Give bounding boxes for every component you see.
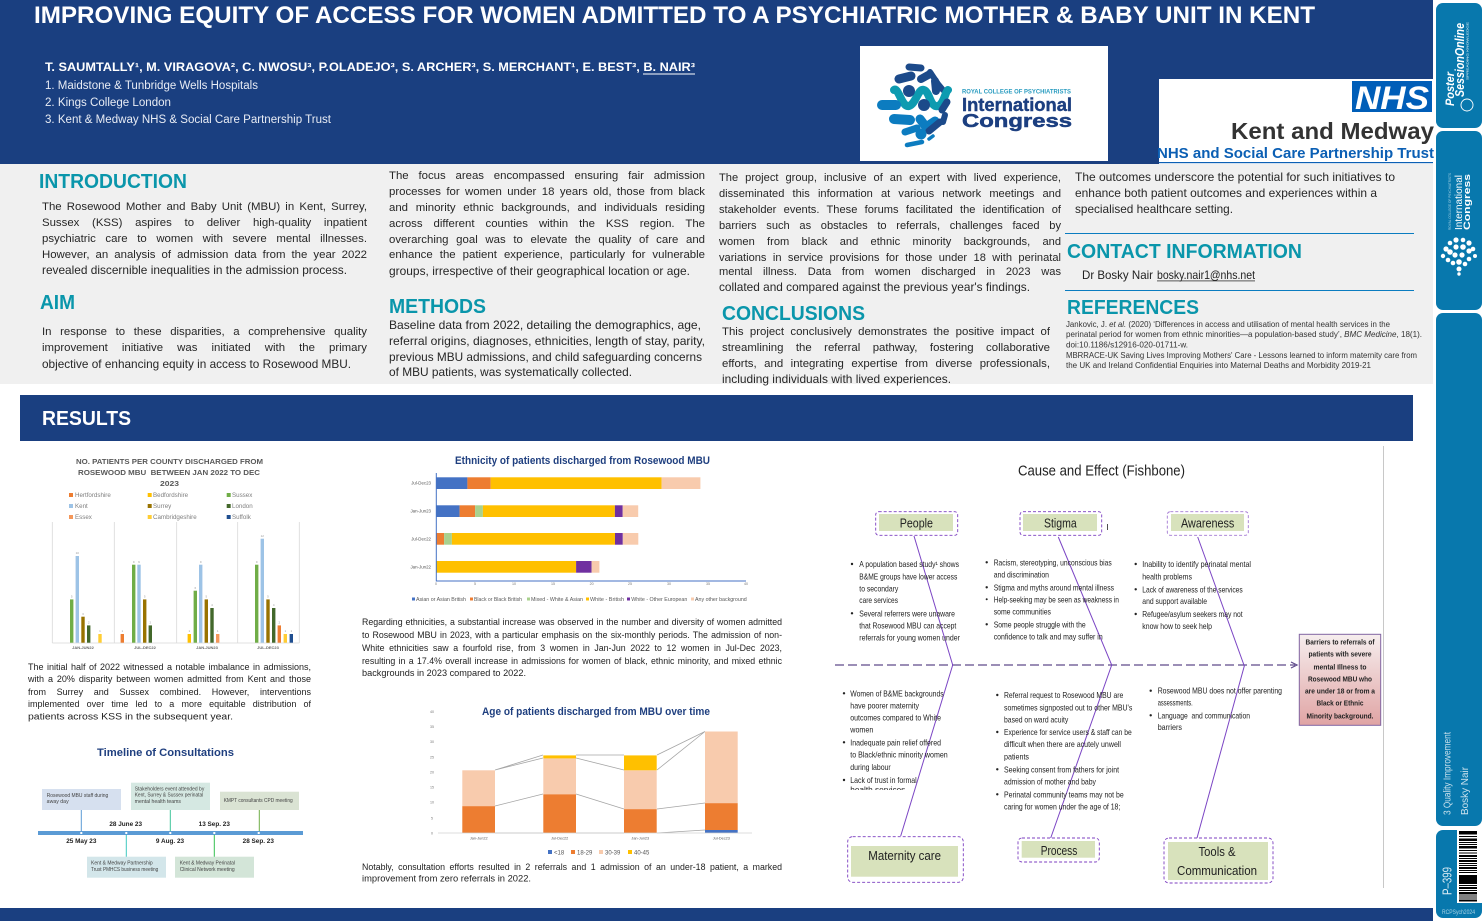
- affiliations: [45, 80, 332, 126]
- text: conclusions: including individuals with lived experiences.: [722, 373, 951, 386]
- category: People: [876, 512, 958, 535]
- text: ethnicity commentary: White ethnicities saw a fourfold rise, from 3 women in Jan-Jun 2022 to 12 women in Jul-Dec 2023,: [362, 643, 782, 653]
- logo: NHS Kent and Medway: Kent and Medway: [1231, 118, 1434, 144]
- sidebar panel: theme and author: Bosky Nair: [1459, 767, 1471, 815]
- bullets: Awareness: know how to seek help: [1142, 621, 1212, 631]
- bullets: Maternity care: Women of B&ME backgrounds: [850, 688, 944, 698]
- sidebar panel: theme and author: [1436, 313, 1482, 826]
- chart legend: Essex: [75, 514, 93, 521]
- bullets: People: to secondary: [859, 583, 899, 593]
- bullets: Stigma: Help-seeking may be seen as weakness in: [994, 594, 1119, 604]
- chart legend: Sussex: [232, 492, 253, 499]
- axis ticks: 15: [430, 786, 434, 790]
- text: references: the UK and Ireland Confidential Enquiries into Maternal Deaths and Morbidity 2019-21: [1066, 361, 1372, 370]
- chart data labels: 1: [217, 629, 219, 633]
- bullets: Awareness: Inability to identify perinatal mental: [1142, 559, 1251, 569]
- chart legend: [548, 850, 650, 856]
- chart data labels: 3: [82, 612, 84, 616]
- text: ethnicity commentary: to Rosewood MBU in 2023, with a particular emphasis on the six-monthly periods. The admission of non-: [362, 630, 782, 640]
- panel: text sections: [0, 164, 1433, 386]
- column labels: Jan-Jun23: [631, 836, 649, 840]
- text: focus areas: across different counties within the KSS region. The: [389, 218, 705, 230]
- timeline event: stakeholders: mental health teams: [135, 799, 182, 805]
- chart legend: Asian or Asian British: [416, 597, 466, 603]
- bullets: Stigma: Racism, stereotyping, unconscious bias: [994, 557, 1112, 567]
- text: references: MBRRACE-UK Saving Lives Improving Mothers' Care - Lessons learned to inform maternity care from: [1066, 351, 1417, 360]
- text: focus areas: enhance the patient experience, particularly for vulnerable: [389, 249, 705, 261]
- text: aim: In response to these disparities, a comprehensive quality: [42, 326, 367, 338]
- text: age commentary: improvement from zero referrals in 2022.: [362, 874, 531, 884]
- timeline event: PMHCS: [87, 857, 166, 878]
- text: project group: barriers such as obstacles to referrals, challenges faced by: [719, 220, 1061, 232]
- chart legend: 30-39: [605, 850, 621, 856]
- text: references: [1066, 320, 1422, 370]
- category: People: People: [900, 516, 933, 530]
- callout: barriers effect box: Rosewood MBU who: [1308, 675, 1372, 684]
- text: project group: The project group, inclusive of an expert with lived experience,: [719, 172, 1061, 184]
- bullets: Stigma: Stigma and myths around mental illness: [994, 582, 1114, 592]
- text: methods: [389, 319, 705, 379]
- axis ticks: 5: [474, 582, 476, 586]
- bullets: Tools and Communication: barriers: [1158, 722, 1182, 732]
- category: Maternity care: Maternity care: [868, 849, 941, 863]
- sidebar panel: International Congress: International: [1454, 175, 1465, 230]
- chart data labels: [71, 534, 292, 633]
- bullets: Maternity care: [843, 688, 948, 794]
- axis ticks: 5: [431, 816, 433, 820]
- timeline event: away day: Rosewood MBU staff during: [47, 793, 109, 799]
- icon: barcode: [1457, 830, 1482, 903]
- text: introduction: Sussex (KSS) aspires to deliver high-quality inpatient: [42, 217, 367, 229]
- chart legend: Any other background: [695, 597, 747, 603]
- bullets: Awareness: [1134, 559, 1251, 631]
- text: ethnicity commentary: Regarding ethnicities, a substantial increase was observed in the number and diversity of women admitted: [362, 617, 782, 627]
- text: project group: mental illness. Data from women discharged in 2023 was: [719, 266, 1061, 278]
- stacked columns: [462, 732, 738, 833]
- text: aim: improvement initiative was initiated with the primary: [42, 342, 367, 354]
- bullets: Tools and Communication: assessments.: [1158, 698, 1193, 708]
- axis ticks: 0: [435, 582, 437, 586]
- timeline dates: 25 May 23: [66, 838, 97, 845]
- text: county chart commentary: [28, 661, 311, 722]
- chart legend: Surrey: [153, 503, 172, 510]
- bullets: Awareness: health problems: [1142, 571, 1192, 581]
- authors: T. SAUMTALLY¹, M. VIRAGOVA², C. NWOSU³, P.OLADEJO³, S. ARCHER³, S. MERCHANT¹, E. BEST³, B. NAIR³: [45, 62, 695, 74]
- timeline event: stakeholders: Stakeholders event attended by: [135, 787, 205, 793]
- logo: NHS Kent and Medway: [1157, 79, 1434, 164]
- bullets: Process: based on ward acuity: [1004, 714, 1069, 724]
- logo: Royal College of Psychiatrists International Congress: ROYAL COLLEGE OF PSYCHIATRISTS: [962, 88, 1071, 96]
- row labels: [410, 480, 432, 570]
- sidebar panel: Poster Session Online: SPREADING KNOWLEDGE: [1466, 22, 1470, 80]
- text: contact: [1082, 268, 1256, 282]
- heading: contact information: CONTACT INFORMATION: [1067, 241, 1302, 263]
- text: methods: previous MBU admissions, and child safeguarding concerns: [389, 351, 702, 364]
- heading: conclusions: CONCLUSIONS: [722, 303, 865, 325]
- text: introduction: psychiatric care to women with severe mental illnesses.: [42, 233, 367, 245]
- bullets: Process: Experience for service users & staff can be: [1004, 727, 1132, 737]
- text: county chart commentary: patients across KSS in the subsequent year.: [28, 712, 233, 722]
- timeline event: stakeholders: [131, 783, 210, 810]
- text: conclusions: This project conclusively demonstrates the positive impact of: [722, 326, 1050, 338]
- text: outcomes: enhance both patient outcomes and experiences within a: [1075, 187, 1378, 200]
- chart title: ROSEWOOD MBU BETWEEN JAN 2022 TO DEC: [78, 468, 261, 477]
- header band: [0, 0, 1433, 164]
- chart legend: <18: [554, 850, 565, 856]
- heading: introduction: INTRODUCTION: [39, 171, 187, 193]
- bullets: People: A population based study¹ shows: [859, 559, 959, 569]
- row labels: Jul-Dec23: [411, 480, 432, 486]
- chart data labels: 4: [273, 603, 275, 607]
- axis ticks: 15: [551, 582, 555, 586]
- chart legend: White - Other European: [631, 597, 687, 603]
- text: focus areas: [389, 168, 705, 278]
- logo: Royal College of Psychiatrists International Congress: [860, 46, 1108, 161]
- text: ethnicity commentary: resulting in a 17.4% overall increase in admissions for women of black, ethnic minority, and mixed ethnic: [362, 656, 782, 666]
- sidebar panel: International Congress: ROYAL COLLEGE OF PSYCHIATRISTS: [1448, 173, 1452, 230]
- timeline dates: [66, 821, 274, 845]
- bullets: People: care services: [859, 595, 898, 605]
- column labels: Jan-Jun22: [470, 836, 488, 840]
- text: county chart commentary: The initial half of 2022 witnessed a notable imbalance in admissions,: [28, 662, 311, 672]
- category: Stigma: [1020, 512, 1108, 535]
- text: conclusions: efforts, and integrating expertise from diverse professionals,: [722, 358, 1050, 370]
- text: ethnicity commentary: [362, 616, 782, 678]
- bullets: Maternity care: have poorer maternity: [850, 700, 920, 710]
- bullets: Process: caring for women under the age of 18;: [1004, 802, 1120, 812]
- text: references: Jankovic, J. et al. (2020) ‘Differences in access and utilisation of mental health services in the: [1066, 320, 1391, 329]
- text: methods: Baseline data from 2022, detailing the demographics, age,: [389, 319, 701, 332]
- bullets: Tools and Communication: [1150, 686, 1282, 732]
- chart data labels: 5: [144, 594, 146, 598]
- chart data labels: 5: [71, 594, 73, 598]
- chart data labels: 4: [211, 603, 213, 607]
- timeline dates: 9 Aug. 23: [156, 838, 185, 845]
- chart title: Age of patients discharged from MBU over time: [482, 706, 710, 718]
- text: county chart commentary: with a 20% disparity between women admitted from Kent and those: [28, 674, 311, 684]
- logo: NHS Kent and Medway: NHS and Social Care Partnership Trust: [1157, 145, 1434, 162]
- axis ticks: 30: [667, 582, 671, 586]
- axis ticks: [435, 582, 748, 586]
- chart: age of patients: [430, 706, 752, 856]
- chart data labels: 1: [290, 629, 292, 633]
- sidebar panel: Poster Session Online: SessionOnline: [1452, 23, 1467, 97]
- row labels: Jan-Jun22: [410, 564, 432, 570]
- text: methods: referral origins, diagnoses, ethnicities, length of stay, parity,: [389, 335, 705, 348]
- text: ethnicity commentary: backgrounds in 2023 compared to 2022.: [362, 668, 526, 678]
- text: project group: collated and compared against the previous year's findings.: [719, 281, 1030, 294]
- chart data labels: 9: [138, 560, 140, 564]
- axis ticks: 30: [430, 740, 434, 744]
- chart data labels: 9: [133, 560, 135, 564]
- timeline event: perinatal network: Clinical Network meeting: [180, 867, 235, 873]
- sidebar panel: poster id and barcode: RCPSych2024: [1442, 910, 1476, 916]
- chart title: 2023: [160, 479, 179, 488]
- axis ticks: 20: [590, 582, 594, 586]
- bullets: Process: Seeking consent from fathers for joint: [1004, 764, 1120, 774]
- text: introduction: The Rosewood Mother and Baby Unit (MBU) in Kent, Surrey,: [42, 201, 367, 213]
- icon: globe: [1461, 99, 1473, 111]
- axis ticks: 10: [430, 800, 434, 804]
- text: introduction: [42, 199, 367, 277]
- text: project group: disseminated this information at various network meetings and: [719, 188, 1061, 200]
- bullets: People: Several referrers were unaware: [859, 608, 955, 618]
- chart data labels: 9: [256, 560, 258, 564]
- chart data labels: 5: [205, 594, 207, 598]
- chart legend: Cambridgeshire: [153, 514, 197, 521]
- timeline event: KMPT: [220, 792, 299, 810]
- chart legend: [69, 492, 253, 521]
- chart data labels: 1: [284, 629, 286, 633]
- row labels: Jul-Dec22: [411, 536, 432, 542]
- category: Awareness: [1167, 512, 1248, 535]
- column labels: Jul-Dec23: [713, 836, 730, 840]
- chart data labels: 10: [76, 551, 79, 555]
- chart title: Ethnicity of patients discharged from Rosewood MBU: [455, 455, 710, 467]
- bullets: Stigma: Some people struggle with the: [994, 619, 1086, 629]
- text: county chart commentary: from Surrey and Sussex combined. However, interventions: [28, 686, 311, 696]
- heading: references: REFERENCES: [1067, 297, 1199, 319]
- chart legend: Bedfordshire: [153, 492, 189, 499]
- chart data labels: 1: [99, 629, 101, 633]
- bullets: Awareness: and support available: [1142, 596, 1207, 606]
- chart: ethnicity: [410, 455, 748, 603]
- timeline event: perinatal network: [175, 857, 254, 878]
- text: project group: [719, 170, 1061, 294]
- sidebar panel: poster id and barcode: [1436, 830, 1482, 918]
- text: outcomes: specialised healthcare setting.: [1075, 203, 1233, 216]
- timeline event: PMHCS: Trust PMHCS business meeting: [91, 867, 159, 873]
- fishbone ribs: [901, 536, 1244, 838]
- category: Stigma: Stigma: [1044, 516, 1077, 530]
- category: Maternity care: [848, 837, 963, 882]
- sidebar panel: theme and author: 3 Quality Improvement: [1442, 732, 1454, 815]
- text: focus areas: overarching goal was to elevate the quality of care and: [389, 234, 705, 246]
- callout: barriers effect box: Barriers to referrals of: [1306, 637, 1375, 646]
- chart axis labels: JAN-JUN23: [196, 645, 219, 650]
- bullets: Stigma: [986, 557, 1119, 642]
- chart legend: Kent: [75, 503, 88, 510]
- axis ticks: 25: [628, 582, 632, 586]
- bullets: Maternity care: during labour: [850, 762, 891, 772]
- axis ticks: 35: [430, 725, 434, 729]
- chart axis labels: [72, 645, 280, 650]
- affiliations: 2. Kings College London: [45, 97, 171, 109]
- text: references: perinatal period for women from ethnic minorities—a population-based study’, BMC Medicine, 18(1).: [1066, 330, 1422, 339]
- bullets: Stigma: and discrimination: [994, 569, 1049, 579]
- text: aim: objective of enhancing equity in access to Rosewood MBU.: [42, 358, 351, 371]
- callout: barriers effect box: [1299, 634, 1381, 725]
- bullets: Maternity care: Inadequate pain relief offered: [850, 737, 941, 747]
- chart axis labels: JAN-JUN22: [72, 645, 95, 650]
- bullets: Process: Referral request to Rosewood MBU are: [1004, 690, 1124, 700]
- axis ticks: 35: [706, 582, 710, 586]
- chart legend: Hertfordshire: [75, 492, 111, 499]
- bullets: Awareness: Refugee/asylum seekers may not: [1142, 609, 1243, 619]
- timeline bar: [38, 831, 303, 835]
- bullets: People: that Rosewood MBU can accept: [859, 620, 957, 630]
- column labels: [470, 836, 730, 840]
- text: focus areas: and minority ethnic backgrounds, and individuals residing: [389, 202, 705, 214]
- text: aim: [42, 324, 367, 371]
- footer band: [0, 908, 1433, 921]
- text: project group: women from black and ethnic minority backgrounds, and: [719, 236, 1061, 248]
- bullets: Maternity care: outcomes compared to White: [850, 712, 941, 722]
- axis ticks: 10: [512, 582, 516, 586]
- logo: Royal College of Psychiatrists International Congress: International: [962, 95, 1072, 115]
- row labels: Jan-Jun23: [410, 508, 432, 514]
- text: conclusions: streamlining the referral pathway, fostering collaborative: [722, 342, 1050, 354]
- timeline event: away day: [42, 789, 121, 810]
- text: project group: variations in service provisions for those under 18 with perinatal: [719, 252, 1061, 264]
- fishbone title: Cause and Effect (Fishbone): [1018, 462, 1185, 480]
- axis ticks: 25: [430, 756, 434, 760]
- bullets: Process: patients: [1004, 751, 1029, 761]
- axis ticks: 40: [430, 710, 434, 714]
- axis ticks: 20: [430, 770, 434, 774]
- chart legend: Black or Black British: [474, 597, 522, 603]
- text: conclusions: [722, 324, 1050, 386]
- bullets: People: referrals for young women under: [859, 633, 960, 643]
- bullets: Process: sometimes signposted out to other MBU's: [1004, 702, 1132, 712]
- timeline event: perinatal network: Kent & Medway Perinatal: [180, 861, 235, 867]
- bullets: Maternity care: health services: [850, 784, 905, 794]
- sidebar panel: Poster Session Online: [1436, 3, 1482, 128]
- category: Tools and Communication: Tools &: [1198, 845, 1236, 859]
- chart data labels: 2: [278, 620, 280, 624]
- sidebar panel: poster id and barcode: P–399: [1440, 867, 1454, 895]
- sidebar panel: International Congress: [1436, 131, 1482, 310]
- timeline dates: 28 June 23: [109, 821, 142, 828]
- heading: methods: METHODS: [389, 296, 486, 318]
- chart title: NO. PATIENTS PER COUNTY DISCHARGED FROM: [76, 457, 263, 466]
- fishbone diagram: [835, 446, 1384, 888]
- chart legend: White - British: [590, 597, 624, 603]
- category: Process: [1018, 838, 1099, 862]
- text: references: doi:10.1186/s12916-020-01711-w.: [1066, 340, 1188, 350]
- chart data labels: 1: [121, 629, 123, 633]
- callout: barriers effect box: mental Illness to: [1314, 662, 1367, 671]
- axis ticks: [430, 710, 434, 836]
- timeline event: PMHCS: Kent & Medway Partnership: [91, 861, 153, 867]
- bullets: Awareness: Lack of awareness of the services: [1142, 584, 1243, 594]
- bullets: Maternity care: Lack of trust in formal: [850, 775, 917, 785]
- chart title: [76, 457, 263, 488]
- chart bars: [70, 539, 293, 643]
- category: Awareness: Awareness: [1181, 516, 1234, 530]
- heading: results: RESULTS: [42, 408, 131, 430]
- text: focus areas: The focus areas encompassed ensuring fair admission: [389, 170, 705, 182]
- timeline of consultations: [38, 747, 303, 878]
- bullets: Process: [996, 690, 1132, 812]
- text: contact: bosky.nair1@nhs.net: [1157, 268, 1256, 282]
- callout: barriers effect box: Black or Ethnic: [1316, 699, 1364, 708]
- chart data labels: 2: [149, 620, 151, 624]
- text: introduction: However, an analysis of admission data from the year 2022: [42, 249, 367, 261]
- heading: aim: AIM: [40, 292, 75, 314]
- bullets: Stigma: confidence to talk and may suffer in: [994, 632, 1103, 642]
- sidebar panel: Poster Session Online: Poster: [1443, 71, 1457, 106]
- logo: Royal College of Psychiatrists International Congress: Congress: [962, 111, 1072, 131]
- affiliations: 3. Kent & Medway NHS & Social Care Partnership Trust: [45, 114, 332, 126]
- text: focus areas: groups, irrespective of their geographical location or age.: [389, 265, 690, 278]
- chart axis labels: JUL-DEC22: [134, 645, 157, 650]
- timeline title: Timeline of Consultations: [97, 747, 234, 759]
- bullets: Process: difficult when there are acutely unwell: [1004, 739, 1121, 749]
- chart legend: Suffolk: [232, 514, 252, 521]
- chart legend: 40-45: [634, 850, 650, 856]
- icon: NHS lozenge: NHS: [1355, 80, 1430, 116]
- timeline event: KMPT: KMPT consultants CPD meeting: [224, 798, 293, 804]
- text: methods: of MBU patients, was systematically collected.: [389, 366, 632, 379]
- timeline dates: 13 Sep. 23: [199, 821, 230, 828]
- bullets: Process: Perinatal community teams may not be: [1004, 789, 1124, 799]
- axis ticks: 40: [744, 582, 748, 586]
- category: Tools and Communication: [1164, 838, 1273, 883]
- bullets: Maternity care: to Black/ethnic minority women: [850, 750, 948, 760]
- bullets: Maternity care: women: [849, 724, 874, 734]
- callout: barriers effect box: Minority background.: [1306, 712, 1374, 721]
- bullets: People: [851, 559, 960, 643]
- chart axis labels: JUL-DEC23: [257, 645, 280, 650]
- affiliations: 1. Maidstone & Tunbridge Wells Hospitals: [45, 80, 258, 92]
- timeline event: stakeholders: Kent, Surrey & Sussex perinatal: [135, 793, 203, 799]
- bullets: People: B&ME groups have lower access: [859, 571, 957, 581]
- text: age commentary: [362, 860, 782, 884]
- heading: results: [20, 395, 1413, 441]
- text: outcomes: The outcomes underscore the potential for such initiatives to: [1075, 171, 1395, 184]
- text: contact: Dr Bosky Nair: [1082, 268, 1153, 282]
- fishbone spine arrow: [835, 662, 1297, 668]
- chart data labels: 1: [188, 629, 190, 633]
- sidebar panel: International Congress: Congress: [1462, 174, 1473, 230]
- timeline dates: 28 Sep. 23: [243, 838, 274, 845]
- chart legend: Mixed - White & Asian: [531, 597, 583, 603]
- text: age commentary: Notably, consultation efforts resulted in 2 referrals and 1 admission of an under-18 patient, a marked: [362, 862, 782, 872]
- text: project group: stakeholder events. These forums facilitated the identification of: [719, 204, 1061, 216]
- text: county chart commentary: implemented over time led to a more equitable distribution of: [28, 699, 311, 709]
- callout: barriers effect box: are under 18 or from a: [1305, 687, 1376, 696]
- callout: barriers effect box: patients with severe: [1308, 650, 1372, 659]
- icon: congress dot globe: [1441, 237, 1477, 276]
- chart legend: [412, 597, 747, 603]
- chart data labels: 6: [194, 586, 196, 590]
- bullets: Stigma: some communities: [994, 606, 1051, 616]
- title: IMPROVING EQUITY OF ACCESS FOR WOMEN ADMITTED TO A PSYCHIATRIC MOTHER & BABY UNIT IN KENT: [34, 2, 1315, 29]
- category: Process: Process: [1041, 844, 1077, 858]
- axis ticks: 0: [431, 832, 433, 836]
- chart data labels: 2: [88, 620, 90, 624]
- text: focus areas: processes for women under 18 years old, those from black: [389, 186, 705, 198]
- bullets: Tools and Communication: Language and communication: [1158, 710, 1250, 720]
- chart: patients per county: [52, 457, 299, 650]
- series lines: [495, 732, 705, 833]
- column labels: Jul-Dec22: [551, 836, 568, 840]
- bullets: Tools and Communication: Rosewood MBU does not offer parenting: [1158, 686, 1282, 696]
- chart legend: 18-29: [577, 850, 593, 856]
- bullets: Process: admission of mother and baby: [1004, 777, 1097, 787]
- chart legend: London: [232, 503, 253, 510]
- chart data labels: 5: [267, 594, 269, 598]
- category: Tools and Communication: Communication: [1177, 864, 1257, 878]
- timeline event: away day: away day: [47, 799, 69, 805]
- chart data labels: 12: [261, 534, 264, 538]
- stacked bars: [436, 477, 700, 573]
- text: outcomes: [1075, 171, 1395, 216]
- text: introduction: revealed discernible inequalities in the admission process.: [42, 264, 347, 277]
- chart data labels: 9: [200, 560, 202, 564]
